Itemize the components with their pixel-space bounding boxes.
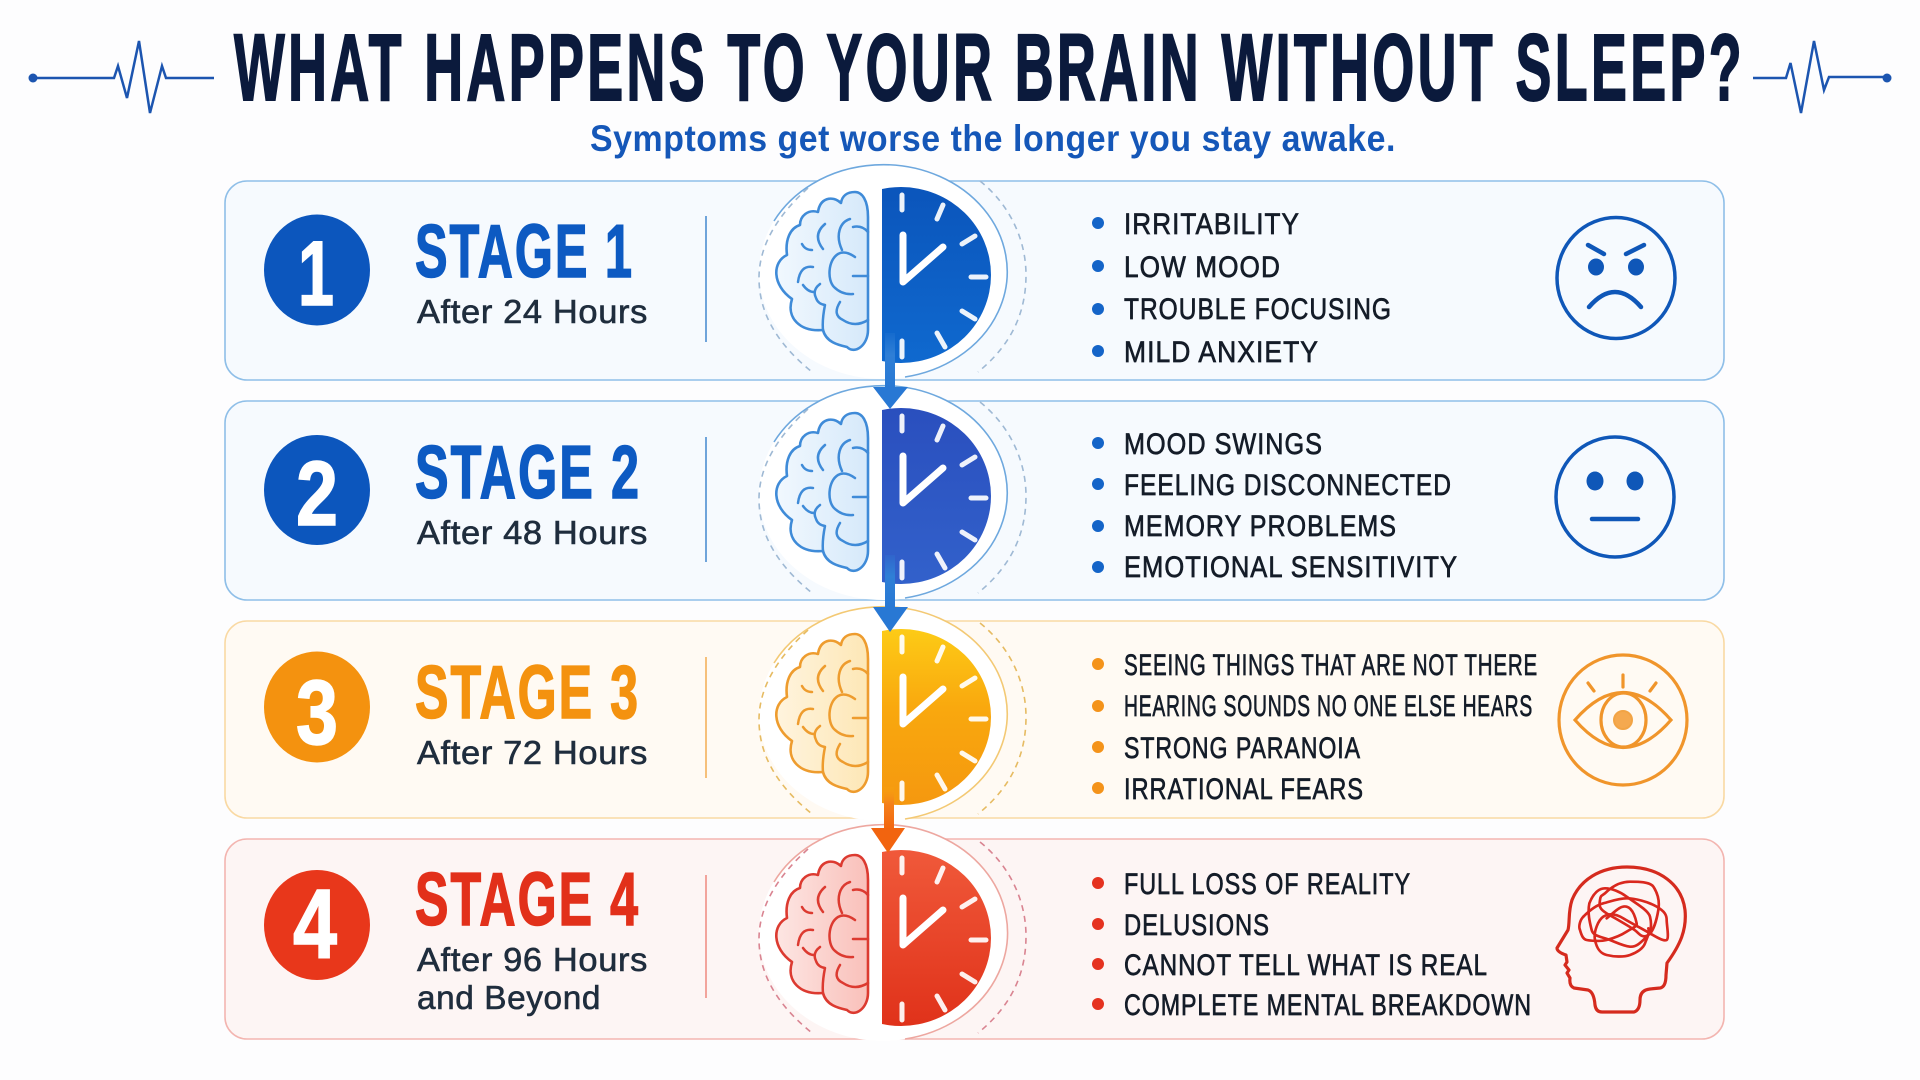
brain — [776, 855, 868, 1013]
stage 3 heading: STAGE 3 — [415, 650, 640, 734]
stage 3 symptoms: SEEING THINGS THAT ARE NOT THERE — [1124, 649, 1538, 682]
stage 3 symptoms: HEARING SOUNDS NO ONE ELSE HEARS — [1124, 690, 1533, 723]
arrow: stage 2 to stage 3 — [873, 555, 908, 632]
stage 2 emblem: brain and clock — [759, 386, 1026, 600]
stage 3 emblem: brain and clock — [759, 607, 1026, 821]
stage 2 symptoms: MOOD SWINGS — [1124, 428, 1323, 461]
stage 1 symptoms — [1092, 208, 1392, 369]
stage 1 badge — [264, 214, 370, 326]
stage 3 badge — [264, 652, 370, 764]
stage 2 divider — [705, 437, 707, 562]
stage 4 symptoms — [1092, 868, 1532, 1022]
icon: heartbeat left — [28, 41, 214, 113]
stage 4 badge: 4 — [293, 869, 337, 979]
stage 1 symptoms: MILD ANXIETY — [1124, 336, 1319, 369]
stage 4 symptoms: COMPLETE MENTAL BREAKDOWN — [1124, 989, 1532, 1022]
stage 2 symptoms — [1092, 428, 1458, 584]
stage 2 badge: 2 — [296, 443, 338, 545]
stage 3 symptoms — [1092, 649, 1538, 806]
stage 4 symptoms: DELUSIONS — [1124, 909, 1270, 942]
icon: heartbeat right — [1753, 41, 1892, 113]
stage 2 symptoms: MEMORY PROBLEMS — [1124, 510, 1397, 543]
stage 4 heading: STAGE 4 — [415, 857, 640, 941]
stage 3 symptoms: IRRATIONAL FEARS — [1124, 773, 1364, 806]
subtitle: Symptoms get worse the longer you stay awake. — [590, 118, 1396, 159]
stage 3 time: After 72 Hours — [417, 734, 648, 771]
stage 1 symptoms: IRRITABILITY — [1124, 208, 1300, 241]
arrow: stage 1 to stage 2 — [873, 333, 908, 409]
stage 4 symptoms: FULL LOSS OF REALITY — [1124, 868, 1411, 901]
stage 4 emblem: brain and clock — [759, 825, 1026, 1041]
icon: neutral face — [1556, 437, 1674, 557]
brain — [776, 413, 868, 571]
stage 1 symptoms: LOW MOOD — [1124, 251, 1281, 284]
stage 2 badge — [264, 435, 370, 545]
stage 1 symptoms: TROUBLE FOCUSING — [1124, 293, 1392, 326]
clock — [882, 629, 991, 805]
stage 3 symptoms: STRONG PARANOIA — [1124, 732, 1361, 765]
panel: stage 4 — [225, 839, 1724, 1039]
icon: head with tangled thoughts — [1557, 867, 1685, 1012]
stage 4 divider — [705, 875, 707, 998]
stage 4 symptoms: CANNOT TELL WHAT IS REAL — [1124, 949, 1488, 982]
stage 1 time: After 24 Hours — [417, 293, 648, 330]
brain — [776, 634, 868, 792]
clock — [882, 187, 991, 363]
stage 1 divider — [705, 216, 707, 342]
stage 1 badge: 1 — [298, 223, 334, 325]
clock — [882, 408, 991, 584]
stage 2 symptoms: EMOTIONAL SENSITIVITY — [1124, 551, 1458, 584]
stage 1 heading: STAGE 1 — [415, 209, 634, 293]
stage 3 divider — [705, 657, 707, 778]
arrow: stage 3 to stage 4 — [871, 787, 905, 853]
brain — [776, 192, 868, 350]
panel: stage 1 — [225, 181, 1724, 380]
stage 4 time: and Beyond — [417, 979, 601, 1016]
stage 4 time — [417, 941, 648, 1016]
stage 2 symptoms: FEELING DISCONNECTED — [1124, 469, 1452, 502]
stage 2 time: After 48 Hours — [417, 514, 648, 551]
stage 4 time: After 96 Hours — [417, 941, 648, 978]
panel: stage 2 — [225, 401, 1724, 600]
icon: eye — [1559, 655, 1687, 785]
clock — [882, 850, 991, 1026]
panel: stage 3 — [225, 621, 1724, 818]
stage 3 badge: 3 — [296, 662, 338, 764]
icon: angry face — [1557, 218, 1675, 338]
stage 2 heading: STAGE 2 — [415, 430, 641, 514]
stage 4 badge — [264, 869, 370, 980]
stage 1 emblem: brain and clock — [759, 165, 1026, 379]
